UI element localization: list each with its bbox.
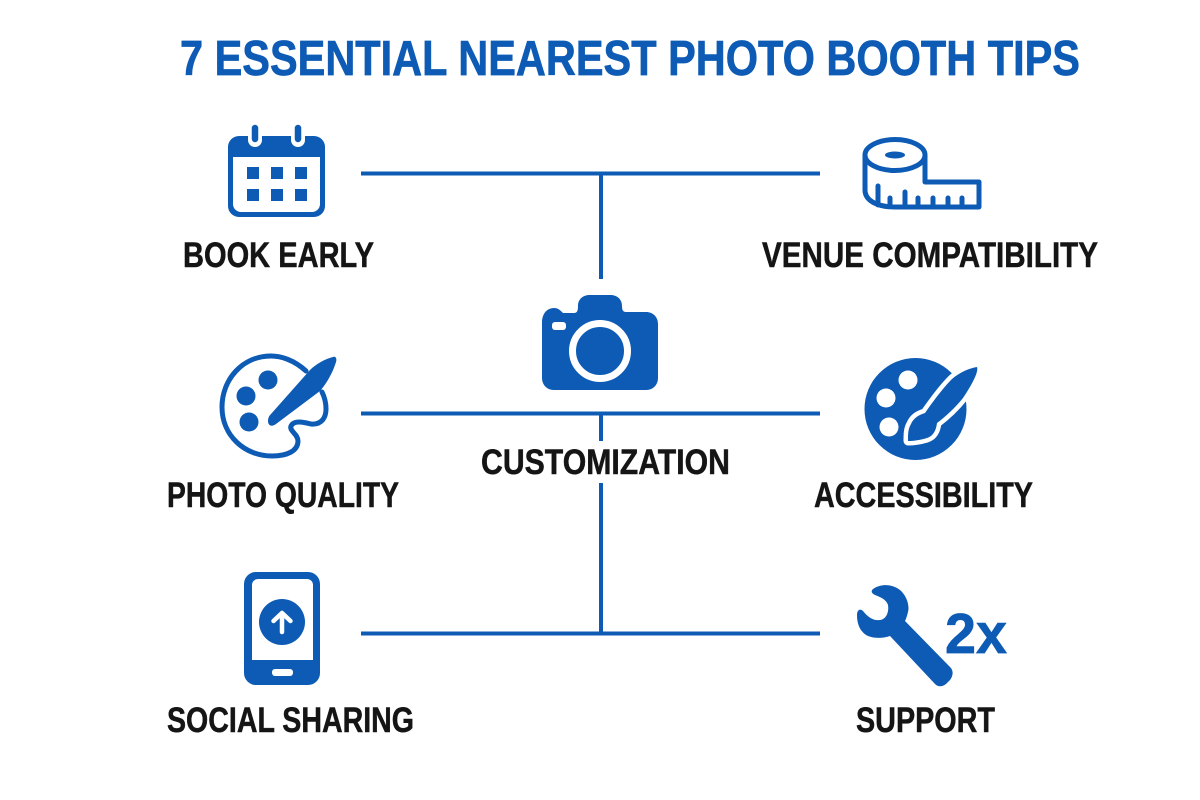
label: customization: CUSTOMIZATION: [481, 443, 730, 482]
tip: social sharing: [167, 572, 414, 740]
icon: phone with upload arrow: [244, 572, 320, 685]
icon: wrench: [857, 585, 953, 686]
label: social sharing: SOCIAL SHARING: [167, 701, 414, 740]
multiplier: 2x: 2x: [945, 602, 1007, 666]
tip: support: [856, 585, 1007, 740]
label: photo quality: PHOTO QUALITY: [167, 476, 399, 515]
icon: palette outline with brush: [222, 356, 336, 456]
icon: calendar: [228, 128, 325, 217]
label: venue compatibility: VENUE COMPATIBILITY: [762, 236, 1098, 275]
icon: solid palette with brush: [864, 358, 977, 460]
label: support: SUPPORT: [856, 701, 995, 740]
label: book early: BOOK EARLY: [183, 236, 374, 275]
icon: measuring tape: [865, 140, 979, 207]
icon: camera: [542, 295, 658, 390]
tip: venue compatibility: [762, 140, 1098, 275]
connector lines: [361, 173, 820, 634]
tip: accessibility: [814, 358, 1033, 515]
tip: book early: [183, 128, 374, 275]
central item: customization: [481, 295, 730, 482]
tip: photo quality: [167, 356, 399, 515]
label: accessibility: ACCESSIBILITY: [814, 476, 1033, 515]
